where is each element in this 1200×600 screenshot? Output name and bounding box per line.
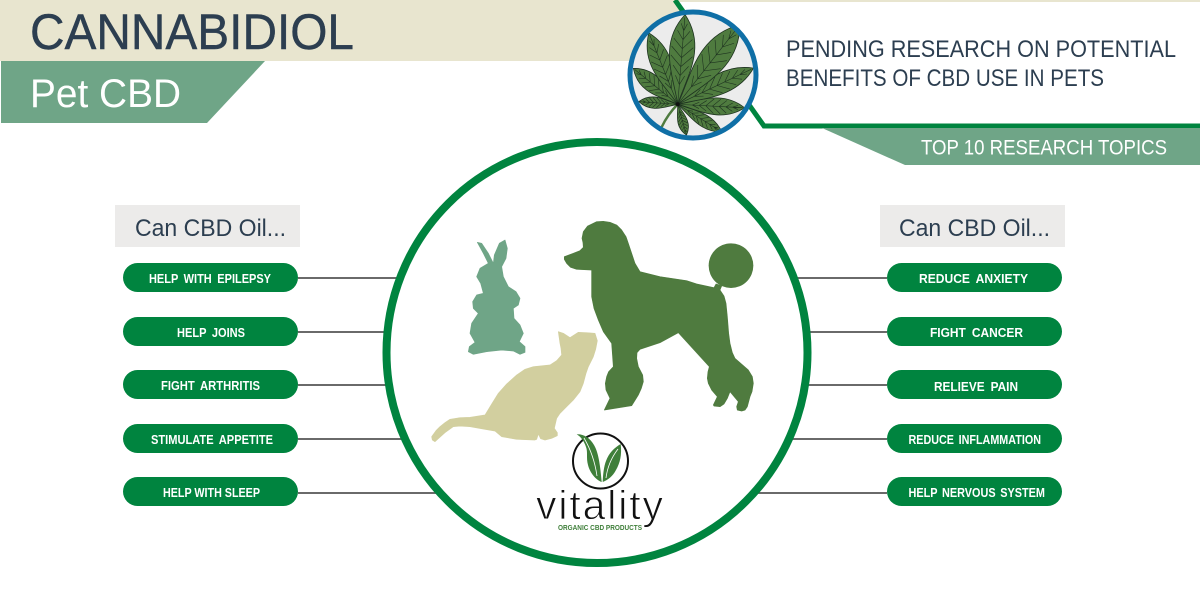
left heading: Can CBD Oil: Can CBD Oil...: [135, 215, 286, 242]
title: Cannabidiol: CANNABIDIOL: [30, 4, 354, 60]
logo: Vitality: ORGANIC CBD PRODUCTS: [558, 525, 642, 532]
subtitle banner: Pet CBD: [1, 61, 265, 123]
icon: poodle silhouette: [564, 221, 753, 411]
pill: help nervous system: [887, 477, 1062, 506]
pill: relieve pain: RELIEVE PAIN: [934, 379, 1018, 394]
pill: fight cancer: [887, 317, 1062, 346]
banner: top 10 research topics: [822, 128, 1200, 165]
heading: pending research: BENEFITS OF CBD USE IN PETS: [786, 65, 1104, 92]
pill: stimulate appetite: [123, 424, 298, 453]
right heading: Can CBD Oil: Can CBD Oil...: [899, 215, 1050, 242]
connector lines: [298, 278, 887, 493]
green header frame line: [675, 0, 1200, 126]
icon: rabbit silhouette: [468, 240, 525, 354]
pill: fight cancer: FIGHT CANCER: [930, 325, 1024, 340]
subtitle banner: Pet CBD: Pet CBD: [30, 72, 181, 116]
pill: reduce anxiety: REDUCE ANXIETY: [919, 271, 1028, 286]
right heading: Can CBD Oil: [880, 205, 1065, 247]
pill: fight arthritis: [123, 370, 298, 399]
icon: cannabis leaf badge: [628, 12, 758, 138]
heading: pending research: [786, 36, 1176, 92]
pill: reduce anxiety: [887, 263, 1062, 292]
pill: stimulate appetite: STIMULATE APPETITE: [151, 432, 273, 447]
pill: help with sleep: HELP WITH SLEEP: [163, 485, 260, 500]
central circle: [386, 142, 808, 563]
pill: reduce inflammation: [887, 424, 1062, 453]
pill: help nervous system: HELP NERVOUS SYSTEM: [908, 485, 1045, 500]
pill: help with sleep: [123, 477, 298, 506]
pill: relieve pain: [887, 370, 1062, 399]
logo: Vitality: [536, 434, 664, 532]
banner: top 10 research topics: TOP 10 RESEARCH TOPICS: [921, 136, 1167, 160]
pill: help with epilepsy: HELP WITH EPILEPSY: [149, 271, 271, 286]
pill: fight arthritis: FIGHT ARTHRITIS: [161, 378, 260, 393]
pill: help joins: [123, 317, 298, 346]
logo: Vitality: vitality: [536, 482, 664, 528]
panel: right questions: [880, 205, 1065, 506]
pill: help with epilepsy: [123, 263, 298, 292]
pill: help joins: HELP JOINS: [177, 325, 245, 340]
left heading: Can CBD Oil: [115, 205, 300, 247]
panel: left questions: [115, 205, 300, 506]
icon: cat silhouette: [432, 332, 597, 442]
pill: reduce inflammation: REDUCE INFLAMMATION: [908, 432, 1041, 447]
header: tan title band: [0, 0, 1200, 61]
